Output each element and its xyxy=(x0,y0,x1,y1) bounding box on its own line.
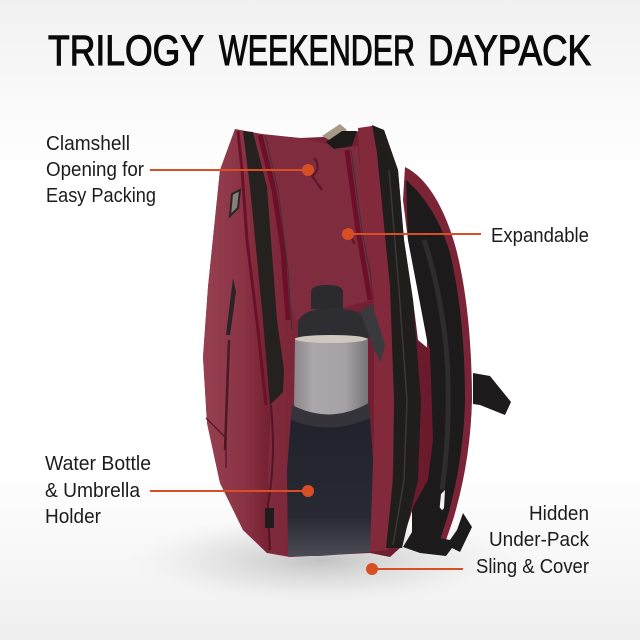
left panel pocket zip xyxy=(226,278,236,335)
callout: hidden under-pack sling: Sling & Cover xyxy=(476,555,589,578)
lower strap buckles xyxy=(403,500,472,556)
mesh pocket xyxy=(287,403,373,556)
band grooves xyxy=(389,170,407,545)
callout: expandable: Expandable xyxy=(491,224,589,247)
brand badge xyxy=(230,190,240,216)
gusset zip lines xyxy=(265,135,373,330)
small tab xyxy=(265,508,274,528)
bag main body xyxy=(203,126,433,557)
front zip strip xyxy=(243,131,284,405)
mesh rim xyxy=(291,403,370,428)
backpack illustration xyxy=(203,124,511,557)
callout: water bottle holder: Holder xyxy=(45,505,101,528)
back straps and padding xyxy=(403,167,472,540)
top grab handle xyxy=(322,124,347,142)
title: TRILOGY xyxy=(48,27,204,75)
front zip burgundy edge xyxy=(238,131,266,405)
callout: water bottle holder xyxy=(45,452,314,528)
title: DAYPACK xyxy=(428,27,591,75)
water bottle xyxy=(294,285,385,416)
black side zipper band xyxy=(372,125,421,548)
expandable gusset xyxy=(263,135,372,320)
gusset zips xyxy=(260,135,370,320)
side strap buckle xyxy=(473,373,511,415)
callout: water bottle holder: Water Bottle xyxy=(45,452,151,475)
bottle cap xyxy=(311,285,343,309)
callout: hidden under-pack sling: Under-Pack xyxy=(489,528,590,551)
callout: clamshell opening: Easy Packing xyxy=(46,184,156,207)
title xyxy=(48,27,591,75)
lower side fold xyxy=(268,405,273,550)
bottle can xyxy=(294,338,368,416)
callout: clamshell opening xyxy=(46,132,314,207)
callout: expandable xyxy=(342,224,589,247)
callout: water bottle holder: & Umbrella xyxy=(45,479,141,502)
callout: clamshell opening: Clamshell xyxy=(46,132,130,155)
cap carry loop xyxy=(360,304,385,362)
left panel highlight xyxy=(203,129,271,553)
burgundy rim strip xyxy=(358,126,397,552)
callout: hidden under-pack sling: Hidden xyxy=(529,502,589,525)
callout: hidden under-pack sling xyxy=(366,502,590,578)
floor shadow xyxy=(125,514,515,606)
callout: clamshell opening: Opening for xyxy=(46,158,144,181)
gusset fold xyxy=(312,158,355,244)
title: WEEKENDER xyxy=(219,27,415,75)
